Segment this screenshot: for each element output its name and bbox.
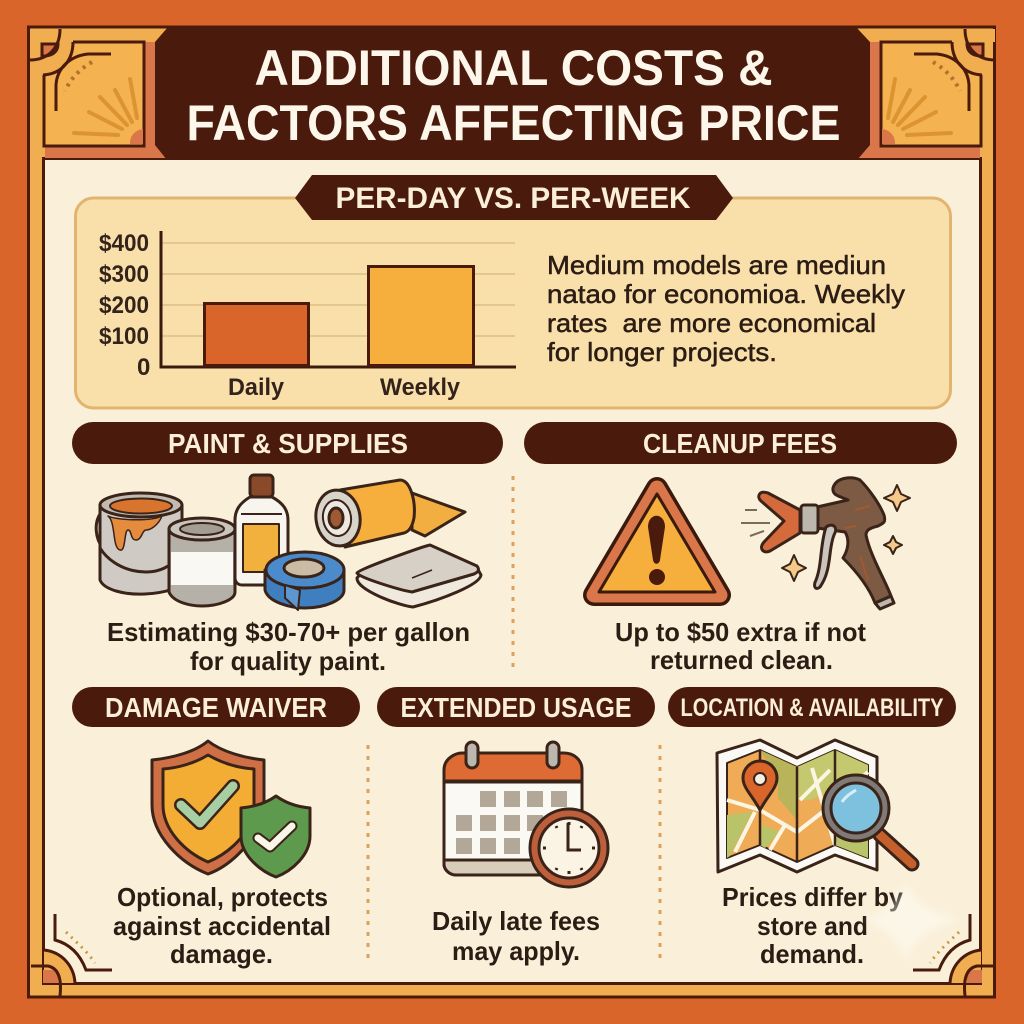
chart description: rates are more economical xyxy=(547,308,876,338)
corner ornament: bottom right xyxy=(913,914,994,996)
icon: paint can, small xyxy=(169,518,235,606)
caption: location and availability: Prices differ by xyxy=(722,882,904,912)
icon: folded cloth xyxy=(357,545,481,607)
caption: location and availability: store and xyxy=(757,911,868,941)
icon: shields xyxy=(152,741,310,877)
corner ornament: top left xyxy=(30,29,167,158)
axis labels: Daily xyxy=(228,374,285,401)
icon: map xyxy=(717,740,912,872)
icon: paint can xyxy=(96,493,182,594)
axis labels: $300 xyxy=(99,261,149,288)
icon: calendar with clock xyxy=(444,742,608,887)
title: ADDITIONAL COSTS & xyxy=(254,40,772,96)
heading: paint and supplies: PAINT & SUPPLIES xyxy=(168,428,408,459)
corner ornament: bottom left xyxy=(31,914,112,996)
axis labels: $100 xyxy=(99,323,149,350)
dotted dividers xyxy=(368,476,660,960)
heading: extended usage xyxy=(377,687,655,727)
magnifier xyxy=(823,775,912,864)
heading: cleanup fees xyxy=(524,422,957,464)
axis labels: 0 xyxy=(137,354,150,381)
icon: plastic roll xyxy=(312,480,465,549)
heading: location and availability xyxy=(668,687,956,727)
large shield xyxy=(152,741,264,874)
heading: cleanup fees: CLEANUP FEES xyxy=(643,428,837,459)
axis labels: $200 xyxy=(99,292,149,319)
caption: cleanup fees: Up to $50 extra if not xyxy=(615,617,866,647)
heading: per-day vs per-week xyxy=(295,175,733,220)
caption: damage waiver: against accidental xyxy=(113,911,331,941)
map pin xyxy=(743,761,777,810)
caption: location and availability: demand. xyxy=(760,939,864,969)
sparkle watermark xyxy=(866,880,958,962)
caption: extended usage: may apply. xyxy=(452,936,580,966)
clock xyxy=(530,809,608,887)
icon: bottle xyxy=(235,475,288,585)
heading: per-day vs per-week: PER-DAY VS. PER-WEEK xyxy=(336,182,691,215)
heading: paint and supplies xyxy=(72,422,503,464)
corner ornament: top right xyxy=(858,29,995,158)
caption: damage waiver: damage. xyxy=(170,939,273,969)
title xyxy=(186,40,840,151)
axis labels: $400 xyxy=(99,230,149,257)
small shield xyxy=(241,796,310,877)
title: FACTORS AFFECTING PRICE xyxy=(186,95,840,151)
heading: damage waiver: DAMAGE WAIVER xyxy=(105,692,327,723)
caption: extended usage: Daily late fees xyxy=(432,906,600,936)
panel: per-day vs per-week xyxy=(76,198,950,408)
heading: damage waiver xyxy=(72,687,360,727)
bar chart xyxy=(99,230,516,401)
chart description: natao for economioa. Weekly xyxy=(547,279,905,309)
icon: warning triangle xyxy=(594,488,720,595)
chart description xyxy=(547,250,905,367)
heading: extended usage: EXTENDED USAGE xyxy=(400,692,632,723)
icon: blue tape xyxy=(265,552,344,610)
caption: paint and supplies xyxy=(107,617,470,676)
chart description: for longer projects. xyxy=(547,337,777,367)
heading: location and availability: LOCATION & AVAILABILITY xyxy=(680,694,944,722)
caption: location and availability xyxy=(722,882,904,969)
bar: daily xyxy=(204,304,308,366)
title banner xyxy=(155,27,870,160)
caption: paint and supplies: Estimating $30-70+ per gallon xyxy=(107,617,470,647)
caption: paint and supplies: for quality paint. xyxy=(190,646,386,676)
caption: damage waiver xyxy=(113,882,331,969)
bar: weekly xyxy=(368,266,474,366)
icon: sparkles xyxy=(741,485,910,581)
axis labels xyxy=(99,230,461,401)
icon: spray gun xyxy=(759,478,894,609)
caption: cleanup fees: returned clean. xyxy=(650,645,833,675)
caption: cleanup fees xyxy=(615,617,866,675)
axis labels: Weekly xyxy=(380,374,461,401)
chart description: Medium models are mediun xyxy=(547,250,886,280)
caption: extended usage xyxy=(432,906,600,966)
caption: damage waiver: Optional, protects xyxy=(117,882,328,912)
